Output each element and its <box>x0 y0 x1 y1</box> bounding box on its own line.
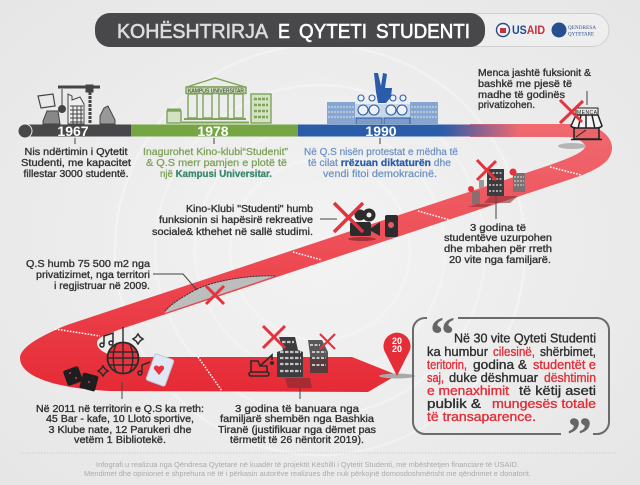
title text: E <box>278 21 290 43</box>
callout text: mungesës totale <box>492 396 596 411</box>
title text: QYTETI <box>299 21 367 43</box>
callout text: duke dëshmuar <box>449 370 539 385</box>
text: territory: Q.S humb 75 500 m2 nga <box>26 258 150 270</box>
text: dormitories: dhe mbahen për rreth <box>444 243 552 255</box>
callout text: teritorin, <box>427 357 467 372</box>
callout text: të transaparence. <box>427 409 536 424</box>
callout text: saj, <box>427 370 444 385</box>
text: canteen: bashkë me pjesë të <box>478 78 572 90</box>
logo: USAID: USAID <box>512 23 545 37</box>
text: 1967: fillestar 3000 studentë. <box>24 168 128 180</box>
text: demolished buildings: tërmetit të 26 nëntorit 2019). <box>230 434 364 446</box>
text: 1990 <box>304 146 458 180</box>
text: cinema <box>152 203 313 238</box>
callout text <box>427 330 596 424</box>
callout text: studentët e <box>533 357 596 372</box>
icon: closing quote: ” <box>567 406 592 462</box>
callout text: dështimin <box>544 370 596 385</box>
icon: closed canteen shop: MENCA <box>577 110 598 116</box>
icon: protest crowd and peace hand <box>327 73 438 124</box>
text: demolished buildings: Tiranë (justifikuar nga dëmet pas <box>218 424 376 436</box>
icon: 2020 location pin: 20 <box>392 336 402 346</box>
text: cinema: Kino-Klubi "Studenti" humb <box>186 203 313 215</box>
red cross: dormitory <box>477 160 496 180</box>
text: canteen: madhe të godinës <box>478 89 565 101</box>
icon: 2020 location pin: 20 <box>392 344 402 354</box>
text: cinema: funksionin si hapësirë rekreative <box>159 214 313 226</box>
timeline bar <box>18 123 520 139</box>
text: 2011 services: 45 Bar - kafe, 10 Lloto sportive, <box>46 413 194 425</box>
text: territory: i regjistruar në 2009. <box>54 280 150 292</box>
logo: Qendresa Qytetare: QENDRESA <box>568 26 596 31</box>
logo: USAID <box>496 23 545 37</box>
title text: STUDENTI <box>376 21 470 43</box>
tick marks <box>75 91 587 399</box>
year 1978: 1978 <box>197 123 229 139</box>
text: demolished buildings: 3 godina të banuara nga <box>235 403 359 415</box>
year 1990: 1990 <box>365 123 397 139</box>
footer divider <box>20 452 616 454</box>
icon: campus temple <box>167 78 271 123</box>
text: 2011 services: 3 Klube nate, 12 Parukeri dhe <box>48 424 192 436</box>
icon: occupied dormitories <box>468 160 525 207</box>
callout text: Në 30 vite Qyteti Studenti <box>454 330 596 346</box>
text: 1967: Studenti, me kapacitet <box>21 157 131 169</box>
text: 1990: vendi fitoi demokracinë. <box>323 168 437 180</box>
callout text: godina & <box>473 357 527 372</box>
text: 1978: Inagurohet Kino-klubi“Studenit” <box>143 146 288 158</box>
text: dormitories <box>444 222 552 266</box>
text: dormitories: 20 vite nga familjarë. <box>449 254 551 266</box>
icon: campus temple: KAMPUS UNIVERSITAR <box>188 88 244 94</box>
icon: closed canteen shop <box>558 100 602 149</box>
text: territory <box>26 258 150 292</box>
text: 2011 services: Në 2011 në territorin e Q.S ka rreth: <box>36 403 204 415</box>
text: cinema: sociale& kthehet në sallë studimi. <box>152 226 313 238</box>
logo: Qendresa Qytetare <box>552 22 596 38</box>
text: 1978 <box>143 146 288 180</box>
text: 1990: të cilat rrëzuan diktaturën dhe <box>308 157 451 169</box>
icon: construction site <box>38 85 115 124</box>
footer text: Infografi u realizua nga Qëndresa Qytetare në kuadër të projektit Këshilli i Qytetit Studenti, me mbështetjen financiare të USAID. <box>96 462 519 469</box>
road crossing dashes <box>55 167 581 391</box>
red cross: canteen <box>560 100 583 123</box>
icon: demolished buildings and excavator <box>249 326 335 388</box>
callout: quote box <box>413 306 609 462</box>
callout text: të këtij aseti <box>519 383 596 398</box>
small red cross <box>320 334 335 349</box>
icon: closed cinema camera <box>334 203 398 241</box>
title text <box>117 21 470 43</box>
callout text: shërbimet, <box>540 344 596 359</box>
text: demolished buildings <box>218 403 376 446</box>
callout text: cilesinë, <box>493 344 535 359</box>
red cross: demolished <box>263 326 285 348</box>
road: red winding path <box>20 124 612 392</box>
text: 1990: Në Q.S nisën protestat e mëdha të <box>304 146 458 158</box>
footer text: Mendimet dhe opinionet e shprehura në të i përkasin autorëve realizues dhe nuk përkojnë domosdoshmërisht me qëndrimet e donatorit. <box>84 471 531 478</box>
text: dormitories: studentëve uzurpohen <box>444 232 552 244</box>
red cross: lost territory <box>206 286 224 304</box>
text: 1978: një Kampusi Universitar. <box>160 168 272 180</box>
callout text: ka humbur <box>427 344 489 359</box>
callout text: publik & <box>427 396 481 411</box>
icon: disco ball, dice, card and notes <box>63 327 174 392</box>
text: canteen <box>478 67 591 111</box>
year 1967: 1967 <box>57 123 89 139</box>
text: 1967: Nis ndërtimin i Qytetit <box>24 146 128 158</box>
text: 1967 <box>21 146 131 180</box>
footer text <box>84 462 531 478</box>
icon: 2020 location pin <box>379 333 415 378</box>
text: territory: privatizimet, nga territori <box>36 269 150 281</box>
red cross: cinema <box>334 203 363 232</box>
text: 2011 services <box>36 403 204 446</box>
title pill <box>95 13 609 47</box>
text: canteen: privatizohen. <box>478 99 535 111</box>
text: 1978: & Q.S merr pamjen e plotë të <box>146 157 287 169</box>
land loss: grey patch on road <box>165 276 275 313</box>
text: demolished buildings: familjarë shembën nga Bashkia <box>220 413 374 425</box>
text: 2011 services: vetëm 1 Bibliotekë. <box>74 434 166 446</box>
logo: Qendresa Qytetare: QYTETARE <box>568 32 594 38</box>
callout text: e menaxhimit <box>427 383 509 398</box>
icon: opening quote: “ <box>430 306 455 362</box>
title text: KOHËSHTRIRJA <box>117 21 269 43</box>
text: canteen: Menca jashtë fuksionit & <box>478 67 591 79</box>
text: dormitories: 3 godina të <box>470 222 526 234</box>
